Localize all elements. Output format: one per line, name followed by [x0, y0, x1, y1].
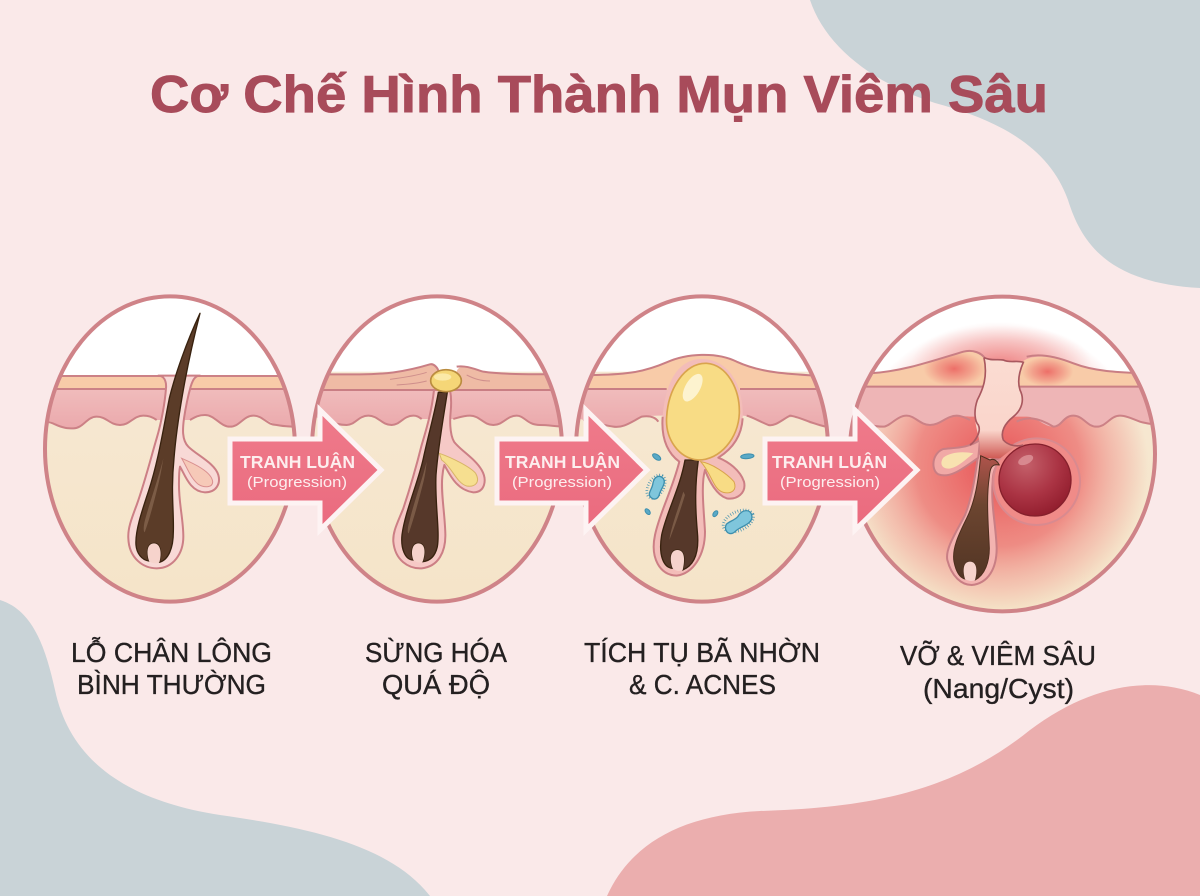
arrow 1 label: TRANH LUẬN: [240, 451, 355, 472]
follicle lower outline: [654, 417, 744, 576]
hair highlight: [669, 492, 685, 540]
hair: [402, 392, 447, 562]
step label 4: [900, 640, 1096, 704]
panel: rupture and deep inflammation: [840, 297, 1170, 615]
circle outline: [45, 296, 295, 602]
channel outline: [970, 358, 1023, 446]
oily gland: [701, 462, 735, 493]
circle outline: [850, 297, 1155, 611]
gland remnant: [933, 440, 980, 475]
cyst ring: [993, 438, 1080, 525]
hair papilla: [671, 550, 684, 571]
background blob: top right: [810, 0, 1200, 288]
inflammation glow: [867, 326, 1142, 605]
gland remnant inner: [941, 452, 973, 469]
arrow 2 label: TRANH LUẬN: [505, 451, 620, 472]
hair: [136, 313, 200, 562]
hair papilla: [412, 543, 425, 562]
circle outline: [576, 296, 828, 602]
hair papilla: [964, 562, 976, 581]
hair highlight: [144, 458, 163, 532]
cyst highlight: [1017, 453, 1035, 467]
step label 3: & C. ACNES: [629, 669, 776, 700]
step label 4: VỠ & VIÊM SÂU: [900, 640, 1096, 671]
sebaceous gland: [182, 458, 213, 487]
panel: normal pore: [43, 294, 297, 604]
cyst: [999, 444, 1071, 516]
follicle: [128, 376, 219, 568]
skin surface redness: [926, 353, 982, 385]
arrow 3 label: TRANH LUẬN: [772, 451, 887, 472]
panel: sebum and C. acnes: [570, 296, 837, 612]
ruptured channel: [975, 358, 1023, 458]
skin surface redness right: [1024, 358, 1071, 386]
hair: [661, 460, 698, 570]
step label 1: BÌNH THƯỜNG: [77, 669, 266, 700]
lower follicle: [947, 453, 1000, 585]
keratin plug: [431, 370, 461, 392]
arrow 2 sublabel: (Progression): [512, 474, 612, 491]
arrow 1: [230, 410, 381, 530]
background blob: bottom right: [607, 685, 1200, 896]
follicle: [393, 390, 485, 568]
hair papilla: [147, 543, 161, 563]
sebum sac: [667, 363, 739, 460]
arrow 2: [497, 410, 647, 530]
small bacteria: [644, 452, 754, 518]
step label 2: SỪNG HÓA: [365, 637, 507, 668]
sebum highlight: [679, 371, 707, 405]
step label 1: [71, 637, 272, 700]
arrow 3: [765, 410, 917, 530]
oily gland: [439, 453, 478, 486]
step label 1: LỖ CHÂN LÔNG: [71, 637, 272, 668]
step label 4: (Nang/Cyst): [923, 673, 1074, 704]
background blob: bottom left: [0, 600, 430, 896]
arrow 1 sublabel: (Progression): [247, 474, 347, 491]
arrow 3 sublabel: (Progression): [780, 474, 880, 491]
follicle: [654, 359, 744, 576]
title: Cơ Chế Hình Thành Mụn Viêm Sâu: [150, 66, 1048, 124]
bacterium left: [643, 472, 669, 501]
step label 3: [584, 637, 820, 700]
plug highlight: [434, 373, 451, 381]
bacterium large: [720, 506, 757, 536]
circle outline: [312, 296, 562, 602]
hair highlight: [408, 462, 427, 533]
white-area redness: [923, 329, 1080, 364]
step label 3: TÍCH TỤ BÃ NHỜN: [584, 637, 820, 668]
panel: hyperkeratinization: [310, 296, 570, 612]
hair: [954, 456, 999, 580]
step label 2: QUÁ ĐỘ: [382, 669, 490, 700]
step label 2: [365, 637, 507, 700]
